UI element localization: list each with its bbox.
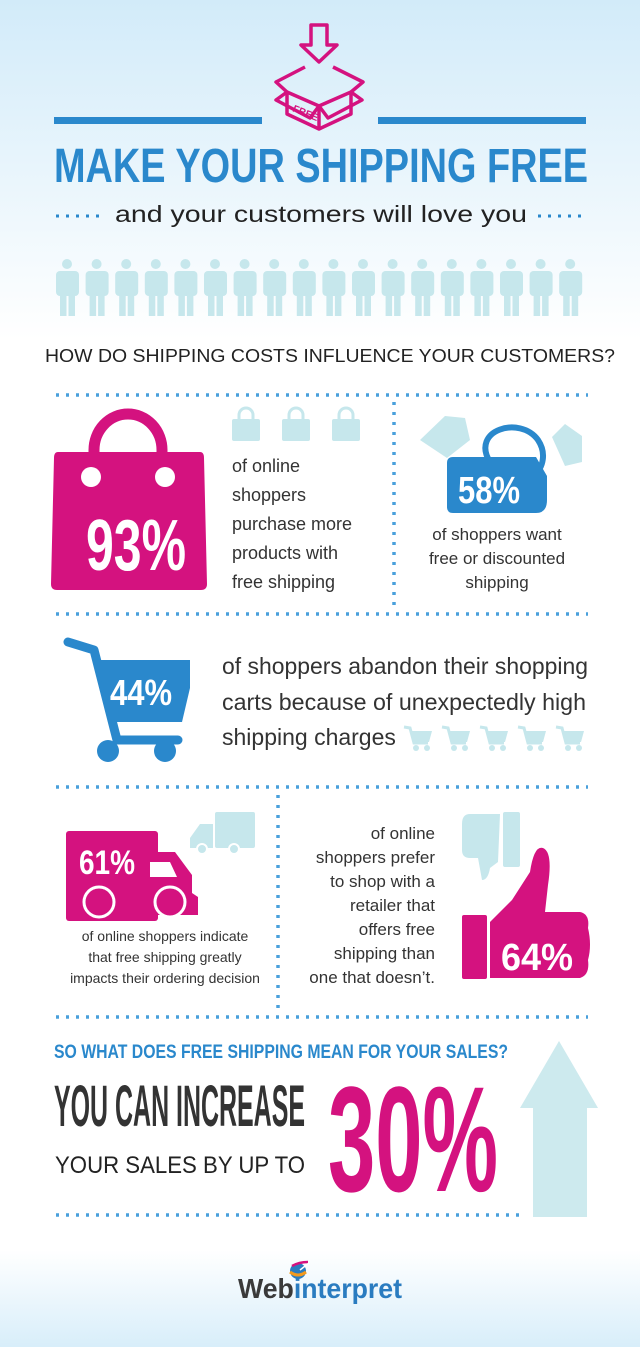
text: 44%: carts because of unexpectedly high [222,689,586,715]
panel: 61% truck: 61% [79,844,135,882]
stat: 30%: 30% [328,1055,498,1223]
text: 44%: shipping charges [222,724,396,750]
text: 93%: products with [232,543,338,563]
icon: thumbs up 64% [462,848,590,979]
text: 64%: shipping than [334,944,435,963]
text: 64%: one that doesn’t. [309,968,435,987]
text: 93%: shoppers [232,485,306,505]
header bars [54,117,586,124]
text: 93%: of online [232,456,300,476]
icon: 58% tag [420,416,582,513]
text: 64%: shoppers prefer [316,848,435,867]
icon: 44% cart [68,642,190,762]
subtitle: and your customers will love you [115,201,527,227]
text: 64%: offers free [359,920,435,939]
text: 44%: of shoppers abandon their shopping [222,653,588,679]
text: 64%: to shop with a [330,872,436,891]
icon: small truck [190,812,255,854]
icon: up arrow [520,1041,598,1217]
text: 61%: impacts their ordering decision [70,970,260,986]
icon: small carts [404,727,584,751]
panel: 93% bag: 93% [86,506,186,586]
panel: 93% bag [51,414,207,590]
text: 58%: of shoppers want [432,525,562,544]
icon: small bags [232,408,360,441]
text: 61%: of online shoppers indicate [82,928,248,944]
text: 64%: retailer that [350,896,435,915]
question heading: HOW DO SHIPPING COSTS INFLUENCE YOUR CUSTOMERS? [45,346,615,366]
heading: sales question: SO WHAT DOES FREE SHIPPING MEAN FOR YOUR SALES? [54,1042,508,1063]
icon: free box: FREE [291,104,320,124]
icon: free box [276,25,363,129]
text: YOU CAN INCREASE [54,1074,305,1139]
logo: Webinterpret: Webinterpret [238,1273,402,1304]
icon: thumbs up 64%: 64% [501,937,573,979]
text: 93%: free shipping [232,572,335,592]
text: 58%: free or discounted [429,549,565,568]
text: 64%: of online [371,824,435,843]
text: your sales by up to: YOUR SALES BY UP TO [55,1152,305,1179]
text: 93%: purchase more [232,514,352,534]
icon: thumbs down [462,812,520,880]
text: 61%: that free shipping greatly [88,949,242,965]
panel: 61% truck [66,831,198,921]
people row [56,259,582,316]
text: 58%: shipping [465,573,529,592]
icon: 44% cart: 44% [110,672,172,713]
icon: 58% tag: 58% [458,470,520,512]
